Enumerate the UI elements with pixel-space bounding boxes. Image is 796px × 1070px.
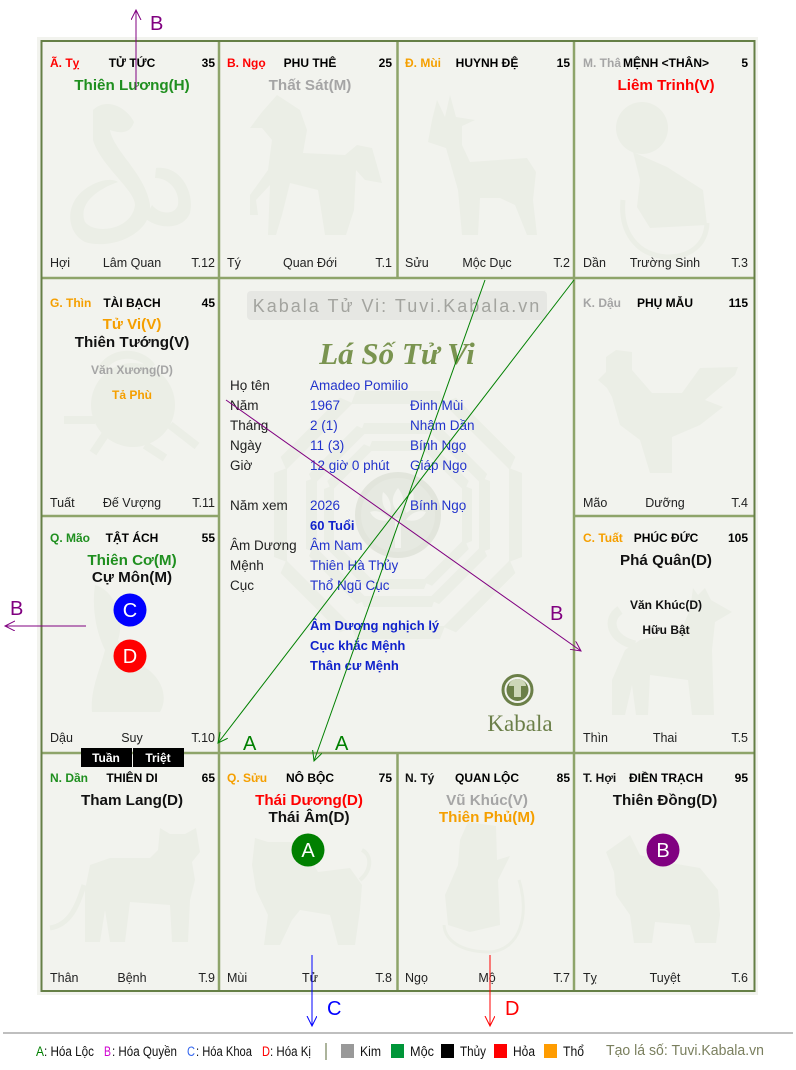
badge: C xyxy=(114,594,146,626)
badge: C: C xyxy=(123,600,137,622)
palace: Ngọ / Phu Thê: B. Ngọ xyxy=(227,56,266,70)
palace: Tuất / Phúc Đức: Thai xyxy=(653,731,677,745)
personal information: Amadeo Pomilio xyxy=(310,378,408,393)
badge: D xyxy=(114,640,146,672)
palace: Tỵ / Tử Tức xyxy=(50,55,215,270)
palace: Tý / Quan Lộc: N. Tý xyxy=(405,771,435,785)
legend: elements: Thủy xyxy=(460,1044,486,1059)
palace: Tuất / Phúc Đức: Văn Khúc(D) xyxy=(630,598,702,612)
goat xyxy=(428,95,537,235)
palace: Ngọ / Phu Thê: Tý xyxy=(227,256,242,270)
palace: Tuất / Phúc Đức: PHÚC ĐỨC xyxy=(634,530,699,545)
rabbit xyxy=(92,585,164,712)
palace: Dần / Thiên Di: N. Dần xyxy=(50,771,88,785)
palace: Tý / Quan Lộc xyxy=(405,770,570,985)
legend: transformations: : Hóa Lộc xyxy=(44,1044,94,1059)
arrow: B left xyxy=(5,625,86,627)
dog xyxy=(612,588,732,715)
palace: Hợi / Điền Trạch: Tuyệt xyxy=(650,971,681,985)
palace: Ngọ / Phu Thê: 25 xyxy=(379,56,392,70)
personal information: Giờ xyxy=(230,458,252,473)
palace: Hợi / Điền Trạch: 95 xyxy=(735,771,748,785)
arrow: D down xyxy=(489,955,491,1026)
palace: Sửu / Nô Bộc: T.8 xyxy=(375,971,392,985)
palace: Dần / Thiên Di: Tham Lang(D) xyxy=(81,792,183,809)
tiger xyxy=(50,828,200,942)
palace: Thìn / Tài Bạch: G. Thìn xyxy=(50,296,91,310)
legend: elements: Kim xyxy=(360,1044,381,1059)
palace: Mùi / Huynh Đệ: Đ. Mùi xyxy=(405,56,441,70)
palace: Tuất / Phúc Đức: C. Tuất xyxy=(583,531,623,545)
personal information: Nhâm Dần xyxy=(410,418,475,433)
arrow labels: B xyxy=(550,603,563,625)
arrow labels xyxy=(10,13,563,1020)
personal information: Tháng xyxy=(230,418,268,433)
personal information: Bính Ngọ xyxy=(410,438,466,453)
palace: Dần / Thiên Di: Thân xyxy=(50,971,79,985)
legend: transformations: : Hóa Quyền xyxy=(112,1044,177,1059)
tags: Tuần Triệt: Triệt xyxy=(145,751,171,765)
legend: transformations: A xyxy=(36,1044,44,1059)
legend: elements: Thổ xyxy=(563,1044,584,1059)
arrow labels: A xyxy=(243,733,257,755)
ox xyxy=(252,838,369,945)
palace: Mùi / Huynh Đệ: 15 xyxy=(557,56,570,70)
palace: Mão / Tật Ách xyxy=(50,530,215,745)
personal information: Cục xyxy=(230,578,254,593)
palace: Tuất / Phúc Đức: Phá Quân(D) xyxy=(620,552,712,569)
palace: Tỵ / Tử Tức: 35 xyxy=(202,56,215,70)
palace: Dậu / Phụ Mẫu: Mão xyxy=(583,496,607,510)
palace: Tý / Quan Lộc: Thiên Phủ(M) xyxy=(439,809,535,826)
palace: Mùi / Huynh Đệ: T.2 xyxy=(553,256,570,270)
monkey xyxy=(616,102,707,257)
arrow labels: A xyxy=(335,733,349,755)
palace: Dần / Thiên Di: 65 xyxy=(202,771,215,785)
arrow: B diagonal xyxy=(226,400,581,651)
legend divider xyxy=(325,1043,327,1060)
site banner: Kabala Tử Vi: Tuvi.Kabala.vn xyxy=(253,296,541,316)
palace: Tý / Quan Lộc: Vũ Khúc(V) xyxy=(446,792,528,809)
palace: Dậu / Phụ Mẫu: T.4 xyxy=(731,496,748,510)
legend: transformations: C xyxy=(187,1044,195,1059)
personal information: 1967 xyxy=(310,398,340,413)
palace: Tuất / Phúc Đức: T.5 xyxy=(731,731,748,745)
snake xyxy=(70,104,191,244)
palace: Dần / Thiên Di: Bệnh xyxy=(117,971,147,985)
palace: Ngọ / Phu Thê: T.1 xyxy=(375,256,392,270)
legend: transformations: : Hóa Khoa xyxy=(196,1044,252,1059)
palace: Dần / Thiên Di: T.9 xyxy=(198,971,215,985)
palace: Mão / Tật Ách: T.10 xyxy=(191,731,215,745)
palace: Dần / Thiên Di xyxy=(50,770,215,985)
palace: Tý / Quan Lộc: Mộ xyxy=(478,971,496,985)
personal information: 60 Tuổi xyxy=(310,518,355,533)
personal information: Mệnh xyxy=(230,558,264,573)
bagua watermark xyxy=(274,391,522,639)
palace: Thìn / Tài Bạch: Đế Vượng xyxy=(103,496,161,510)
palace: Sửu / Nô Bộc xyxy=(227,770,392,985)
palace: Dậu / Phụ Mẫu: K. Dậu xyxy=(583,296,621,310)
arrow: A to Dậu/Dần corner xyxy=(218,280,574,743)
personal information: Thân cư Mệnh xyxy=(310,658,399,673)
palace: Thìn / Tài Bạch: 45 xyxy=(202,296,215,310)
palace: Tuất / Phúc Đức: Thìn xyxy=(583,731,608,745)
personal information: Thiên Hà Thủy xyxy=(310,558,399,573)
palace: Mão / Tật Ách: Suy xyxy=(121,731,144,745)
personal information: Họ tên xyxy=(230,378,270,393)
personal information: Năm xyxy=(230,398,259,413)
personal information xyxy=(230,378,475,673)
palace: Hợi / Điền Trạch: T.6 xyxy=(731,971,748,985)
personal information: 2 (1) xyxy=(310,418,338,433)
horse xyxy=(250,95,382,235)
palace: Thân / Mệnh: T.3 xyxy=(731,256,748,270)
arrow: A to Nô Bộc xyxy=(314,280,485,761)
palace: Sửu / Nô Bộc: NÔ BỘC xyxy=(286,770,334,785)
palace: Ngọ / Phu Thê: PHU THÊ xyxy=(284,55,336,70)
legend: transformations: D xyxy=(262,1044,270,1059)
site banner xyxy=(247,291,547,320)
legend: transformations: : Hóa Kị xyxy=(270,1044,311,1059)
palace: Mão / Tật Ách: TẬT ÁCH xyxy=(106,530,158,545)
palace: Tuất / Phúc Đức xyxy=(583,530,748,745)
pig xyxy=(606,835,720,943)
palace: Thìn / Tài Bạch xyxy=(50,295,215,510)
palace: Tỵ / Tử Tức: T.12 xyxy=(191,256,215,270)
palace: Sửu / Nô Bộc: Thái Âm(D) xyxy=(268,808,350,826)
personal information: Đinh Mùi xyxy=(410,398,463,413)
palace: Tuất / Phúc Đức: 105 xyxy=(728,531,748,545)
palace: Thân / Mệnh: Dần xyxy=(583,256,606,270)
personal information: Ngày xyxy=(230,438,262,453)
tags: Tuần Triệt: Tuần xyxy=(92,751,120,765)
rat xyxy=(444,822,523,952)
personal information: Âm Nam xyxy=(310,538,363,553)
palace: Thìn / Tài Bạch: Tử Vi(V) xyxy=(103,316,161,333)
Kabala logo: Kabala xyxy=(487,711,553,736)
arrow labels: B xyxy=(150,13,163,35)
personal information: Thổ Ngũ Cục xyxy=(310,578,390,593)
palace: Dậu / Phụ Mẫu: 115 xyxy=(729,296,748,310)
palace: Tỵ / Tử Tức: Hợi xyxy=(50,256,70,270)
palace: Sửu / Nô Bộc: Q. Sửu xyxy=(227,771,267,785)
palace: Mùi / Huynh Đệ xyxy=(405,55,570,270)
palace: Ngọ / Phu Thê: Quan Đới xyxy=(283,256,337,270)
palace: Tý / Quan Lộc: 85 xyxy=(557,771,570,785)
personal information: Âm Dương xyxy=(230,538,297,553)
Kabala logo xyxy=(487,676,553,736)
palace grid xyxy=(41,41,755,991)
rooster xyxy=(598,350,738,473)
palace: Tỵ / Tử Tức: Ã. Tỵ xyxy=(50,55,80,70)
palace: Thìn / Tài Bạch: Tuất xyxy=(50,496,75,510)
palace: Dậu / Phụ Mẫu: Dưỡng xyxy=(645,496,685,510)
palace: Mùi / Huynh Đệ: Mộc Dục xyxy=(462,256,512,270)
personal information: Năm xem xyxy=(230,498,288,513)
palace: Ngọ / Phu Thê xyxy=(227,55,392,270)
palace: Sửu / Nô Bộc: 75 xyxy=(379,771,392,785)
palace: Thìn / Tài Bạch: Thiên Tướng(V) xyxy=(75,334,189,351)
palace: Thân / Mệnh: MỆNH <THÂN> xyxy=(623,55,709,70)
palace: Tỵ / Tử Tức: TỬ TỨC xyxy=(109,55,156,70)
palace: Mão / Tật Ách: Dậu xyxy=(50,731,73,745)
badge: B xyxy=(646,834,680,866)
arrow: C down xyxy=(311,955,313,1026)
palace: Sửu / Nô Bộc: Thái Dương(D) xyxy=(255,792,363,809)
personal information: 2026 xyxy=(310,498,340,513)
palace: Mão / Tật Ách: Thiên Cơ(M) xyxy=(87,552,177,569)
palace: Thìn / Tài Bạch: Văn Xương(D) xyxy=(91,363,173,377)
palace: Tý / Quan Lộc: T.7 xyxy=(553,971,570,985)
personal information: Cục khắc Mệnh xyxy=(310,638,405,653)
site credit: Tạo lá số: Tuvi.Kabala.vn xyxy=(606,1043,764,1059)
badge: A xyxy=(292,834,324,866)
palace: Dần / Thiên Di: THIÊN DI xyxy=(106,770,158,785)
heading: Lá Số Tử Vi xyxy=(318,336,475,371)
badge: B: B xyxy=(656,840,670,862)
legend: elements: Mộc xyxy=(410,1044,434,1059)
palace: Thìn / Tài Bạch: T.11 xyxy=(192,496,215,510)
palace: Sửu / Nô Bộc: Tử xyxy=(302,971,318,985)
palace: Thìn / Tài Bạch: TÀI BẠCH xyxy=(103,295,161,310)
palace: Hợi / Điền Trạch: T. Hợi xyxy=(583,771,616,785)
badge: A: A xyxy=(301,840,315,862)
palace: Hợi / Điền Trạch: ĐIỀN TRẠCH xyxy=(629,770,703,785)
palace: Sửu / Nô Bộc: Mùi xyxy=(227,971,247,985)
badge: D: D xyxy=(123,646,137,668)
zodiac watermarks xyxy=(50,95,738,952)
legend: transformations xyxy=(36,1044,311,1059)
palace: Thân / Mệnh: M. Thâ xyxy=(583,56,621,70)
footer rule xyxy=(3,1032,793,1034)
palace: Mùi / Huynh Đệ: Sửu xyxy=(405,256,429,270)
tags: Tuần Triệt xyxy=(81,748,184,767)
palace: Tỵ / Tử Tức: Thiên Lương(H) xyxy=(74,77,190,94)
palace: Hợi / Điền Trạch: Tỵ xyxy=(583,971,598,985)
arrow labels: B xyxy=(10,598,23,620)
palace: Mùi / Huynh Đệ: HUYNH ĐỆ xyxy=(456,55,518,70)
personal information: 11 (3) xyxy=(310,438,344,453)
legend: elements xyxy=(341,1044,584,1059)
palace: Dậu / Phụ Mẫu: PHỤ MẪU xyxy=(637,295,693,310)
personal information: Bính Ngọ xyxy=(410,498,466,513)
personal information: 12 giờ 0 phút xyxy=(310,458,390,473)
palace: Tý / Quan Lộc: Ngọ xyxy=(405,971,428,985)
palace: Thân / Mệnh: 5 xyxy=(741,56,748,70)
palace: Hợi / Điền Trạch xyxy=(583,770,748,985)
arrow labels: C xyxy=(327,998,341,1020)
palace: Mão / Tật Ách: Cự Môn(M) xyxy=(92,569,172,586)
dragon xyxy=(64,355,197,458)
palace: Mão / Tật Ách: Q. Mão xyxy=(50,531,90,545)
palace: Thân / Mệnh xyxy=(583,55,748,270)
palace: Tuất / Phúc Đức: Hữu Bật xyxy=(642,623,690,637)
palace: Mão / Tật Ách: 55 xyxy=(202,531,215,545)
palace: Thân / Mệnh: Trường Sinh xyxy=(630,256,700,270)
personal information: Âm Dương nghịch lý xyxy=(310,618,440,633)
palace: Dậu / Phụ Mẫu xyxy=(583,295,748,510)
palace: Ngọ / Phu Thê: Thất Sát(M) xyxy=(269,77,351,94)
legend: elements: Hỏa xyxy=(513,1044,535,1059)
palace: Hợi / Điền Trạch: Thiên Đồng(D) xyxy=(613,792,717,809)
palace: Thân / Mệnh: Liêm Trinh(V) xyxy=(617,77,715,94)
palace: Tý / Quan Lộc: QUAN LỘC xyxy=(455,770,519,785)
legend: transformations: B xyxy=(104,1044,111,1059)
arrow: B up xyxy=(135,10,137,90)
personal information: Giáp Ngọ xyxy=(410,458,467,473)
palace: Tỵ / Tử Tức: Lâm Quan xyxy=(103,256,161,270)
palace: Thìn / Tài Bạch: Tả Phù xyxy=(112,388,152,402)
arrow labels: D xyxy=(505,998,519,1020)
